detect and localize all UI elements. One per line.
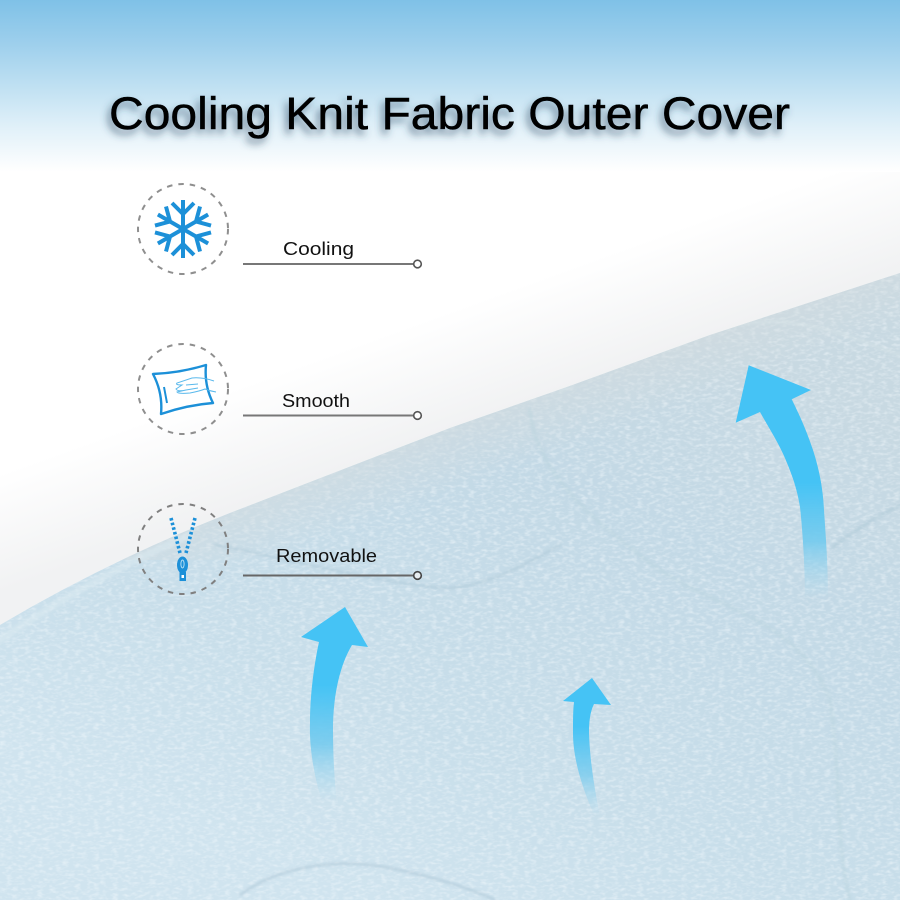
feature: removable — [138, 504, 421, 594]
leader line: Removable — [243, 572, 421, 579]
icon: dashed circle with zipper — [138, 504, 228, 594]
leader line: Smooth — [243, 412, 421, 419]
icon: dashed circle with pillow and hand — [138, 344, 228, 434]
arrow: middle — [563, 678, 611, 817]
arrow: left — [301, 607, 368, 805]
feature: cooling — [138, 184, 421, 274]
label: Cooling: Cooling — [283, 239, 354, 259]
panel: quilted knit fabric cover — [0, 260, 900, 900]
title: Cooling Knit Fabric Outer Cover — [109, 88, 790, 139]
label: Smooth: Smooth — [282, 391, 350, 411]
background: white page with haze — [0, 170, 900, 660]
icon: dashed circle with snowflake — [138, 184, 228, 274]
label: Removable: Removable — [276, 546, 377, 566]
arrow: right — [736, 365, 828, 600]
leader line: Cooling — [243, 260, 421, 268]
feature: smooth — [138, 344, 421, 434]
header: blue sky gradient — [0, 0, 900, 172]
